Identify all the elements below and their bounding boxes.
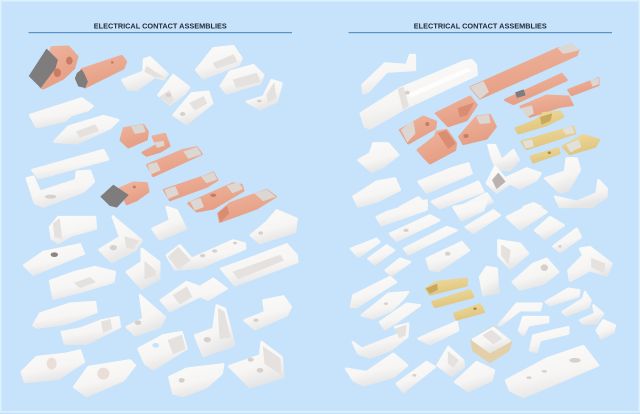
white plate with hole — [427, 242, 469, 271]
white stepped strip — [62, 317, 120, 344]
panel: right page upper contacts — [353, 43, 607, 209]
white forked bracket — [138, 332, 187, 369]
copper block contact with gray tip — [29, 47, 77, 88]
white curved bracket — [519, 317, 548, 335]
right heading rule — [348, 32, 612, 33]
left heading: ELECTRICAL CONTACT ASSEMBLIES — [94, 21, 227, 30]
white strip — [380, 304, 420, 329]
white L strip — [27, 171, 94, 207]
white L contact — [158, 75, 189, 105]
white rounded contact — [33, 302, 97, 328]
white plate — [404, 227, 457, 254]
white long tube — [361, 60, 477, 128]
copper bracket — [436, 97, 477, 126]
white bracket — [122, 57, 168, 90]
white plate — [453, 200, 487, 220]
white stepped contact — [50, 267, 115, 299]
white two-hole bracket — [229, 342, 283, 387]
white winged contact — [498, 240, 528, 269]
white curved bracket — [169, 364, 223, 396]
white curved contact — [50, 217, 96, 243]
white silver-tipped contact — [487, 167, 541, 193]
white small strip — [546, 289, 579, 305]
panel: left page upper contacts — [27, 46, 282, 222]
white long bracket — [221, 65, 263, 93]
white small tab — [386, 259, 410, 275]
white long bracket — [196, 46, 242, 78]
copper bullet contact — [75, 56, 126, 87]
white plate — [432, 182, 483, 208]
white angled bracket — [247, 80, 282, 109]
white plate — [353, 178, 400, 207]
white curved strip — [346, 354, 407, 385]
white bracket — [535, 217, 564, 239]
white strip — [351, 277, 396, 307]
large white plate with holes — [506, 346, 598, 397]
white offset contact — [161, 279, 227, 311]
white complex assembly — [568, 247, 612, 281]
white small L — [562, 292, 591, 315]
copper strip with silver tip — [218, 190, 276, 222]
brass contact — [454, 304, 484, 319]
white plate — [418, 163, 472, 193]
white wide stepped plate — [221, 244, 297, 285]
copper strip double tip — [164, 173, 217, 200]
copper oval contact — [459, 115, 496, 144]
white bracket — [455, 362, 494, 391]
white plate fragment — [523, 203, 542, 209]
white small contact — [580, 305, 603, 324]
brass contact — [432, 290, 473, 307]
white bottle part — [480, 267, 498, 295]
brass strip with round contacts — [522, 127, 575, 149]
copper offset contact — [400, 117, 436, 143]
white right-angle contact — [127, 249, 159, 289]
copper strip with silver tip — [147, 147, 202, 176]
copper small contact — [121, 125, 148, 147]
white upright bracket — [195, 305, 234, 356]
white round contact — [513, 259, 558, 290]
white curved strip — [555, 180, 607, 207]
white bent contact — [418, 322, 458, 344]
white plate — [507, 204, 547, 230]
white tab — [397, 362, 435, 392]
white cam contact — [74, 360, 135, 396]
white curved strip — [353, 324, 408, 358]
panel: left page lower contacts — [22, 207, 297, 396]
white strip — [362, 292, 408, 319]
white L contact — [127, 295, 165, 335]
panel: right page lower contacts — [346, 200, 615, 397]
white plate — [390, 215, 439, 241]
brass strip — [516, 112, 563, 133]
left heading rule — [28, 32, 292, 33]
white plate — [466, 210, 500, 233]
white L contact — [152, 207, 186, 240]
white tapered plate — [54, 116, 118, 143]
long copper strip with silver ends — [471, 43, 578, 98]
white small contact — [597, 320, 615, 339]
white curved bracket — [498, 304, 542, 325]
copper forked contact — [418, 130, 456, 163]
copper strip double tip — [188, 183, 243, 211]
copper plate with gray tip — [101, 183, 148, 207]
white bracket — [358, 143, 398, 172]
white curved bracket — [530, 327, 568, 352]
white small tab — [368, 245, 394, 264]
copper strip — [505, 74, 567, 104]
white offset strip — [167, 240, 245, 270]
brass contact — [426, 279, 467, 294]
white bent strip — [362, 55, 415, 93]
white small tab — [351, 239, 379, 257]
white small bracket — [244, 296, 291, 329]
white L contact — [99, 216, 142, 262]
white plate fragment — [400, 197, 427, 208]
copper small contact — [143, 134, 169, 156]
brass tab — [563, 135, 599, 154]
white cam contact — [22, 350, 84, 382]
white plate fragment — [457, 193, 492, 208]
white contact with dark hole — [24, 244, 84, 275]
white shaped contact — [251, 210, 297, 243]
white flat strip — [32, 150, 108, 178]
white angle bracket — [437, 347, 464, 376]
white bracket — [545, 158, 580, 193]
brass small strip — [531, 148, 559, 162]
white plate — [377, 200, 427, 225]
white L contact — [173, 92, 212, 124]
copper bent strip — [521, 96, 573, 117]
white tab — [553, 229, 581, 252]
right heading: ELECTRICAL CONTACT ASSEMBLIES — [414, 21, 547, 30]
white plate — [30, 98, 93, 127]
white block with tan insert — [472, 327, 511, 362]
white Y contact — [488, 145, 519, 170]
copper small strip — [568, 78, 598, 95]
